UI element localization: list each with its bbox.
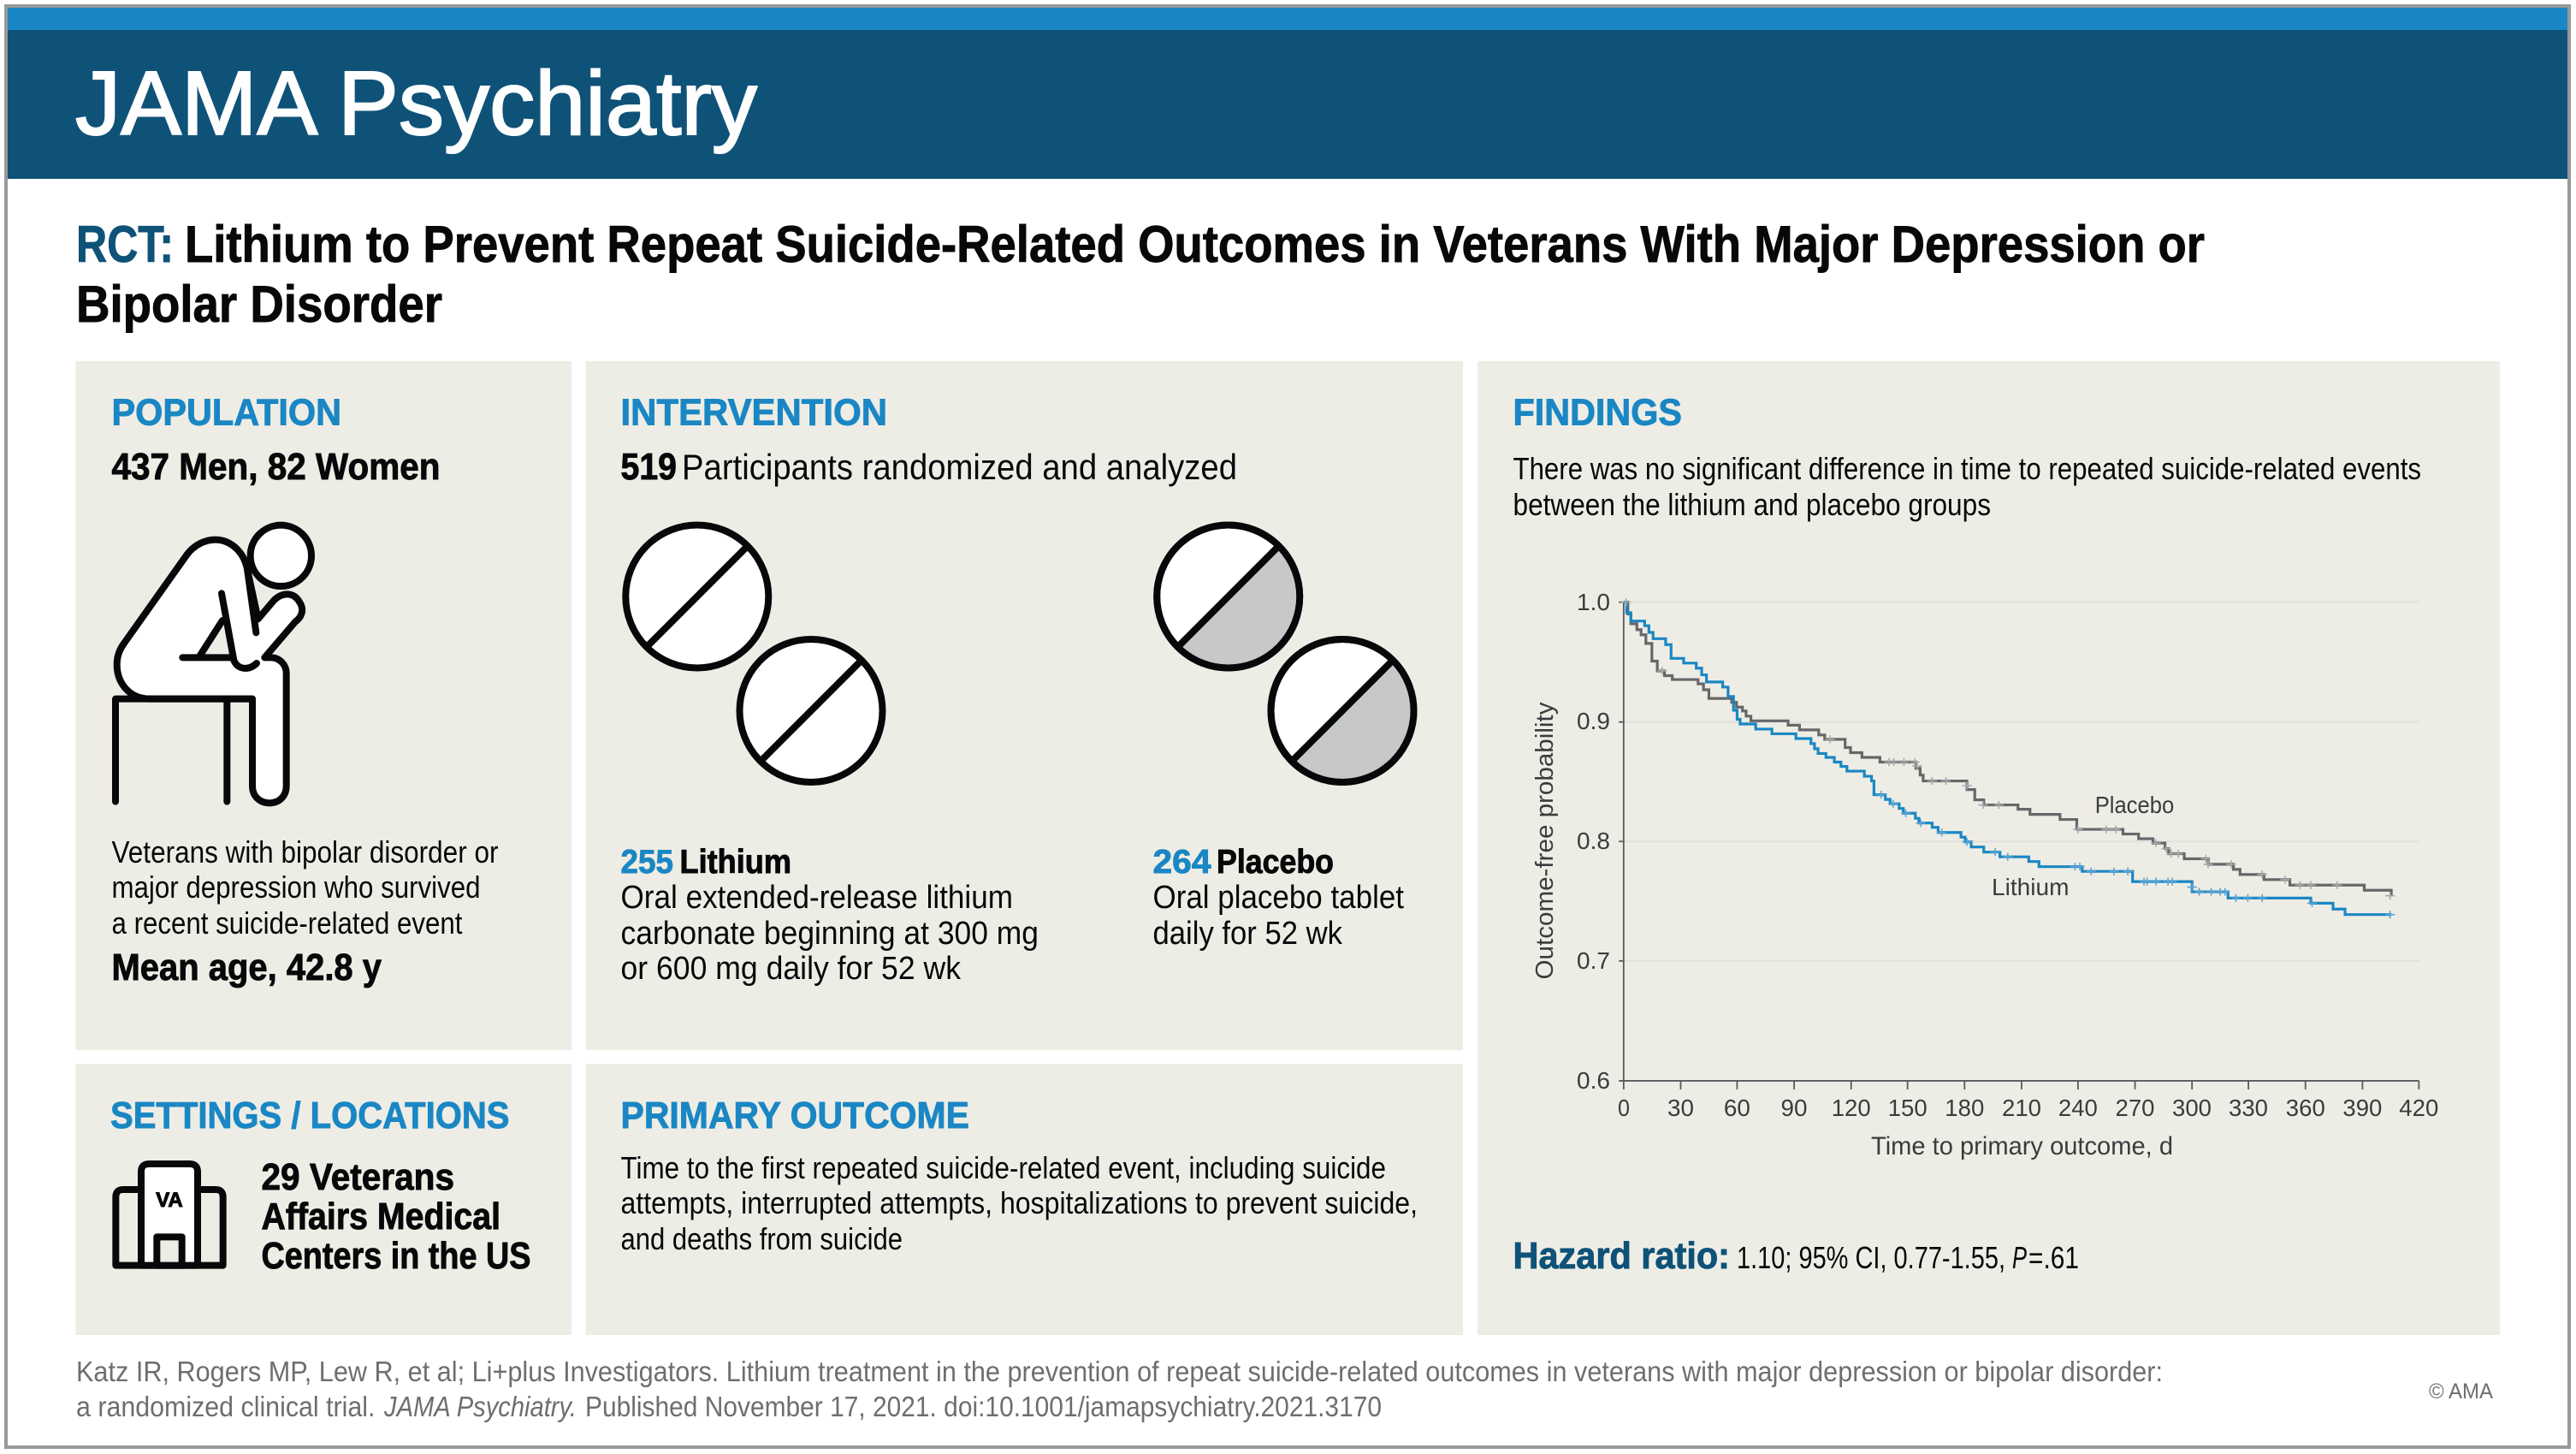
x axis tick labels: 0 bbox=[1618, 1095, 1630, 1121]
primary outcome text: and deaths from suicide bbox=[621, 1221, 903, 1256]
x axis tick labels: 240 bbox=[2058, 1095, 2098, 1121]
placebo arm text: daily for 52 wk bbox=[1153, 916, 1343, 952]
participants count: Participants randomized and analyzed bbox=[682, 447, 1237, 487]
x axis tick labels: 180 bbox=[1945, 1095, 1984, 1121]
mean age: Mean age, 42.8 y bbox=[111, 947, 382, 988]
primary outcome text bbox=[621, 1150, 1418, 1256]
findings text: between the lithium and placebo groups bbox=[1513, 487, 1991, 522]
placebo arm text: 264 bbox=[1153, 844, 1211, 881]
title: RCT: bbox=[76, 216, 174, 273]
primary outcome text: attempts, interrupted attempts, hospitalizations to prevent suicide, bbox=[621, 1185, 1418, 1220]
y axis tick labels: 0.7 bbox=[1577, 947, 1610, 974]
y axis tick labels: 0.8 bbox=[1577, 828, 1610, 854]
x axis tick labels: 420 bbox=[2399, 1095, 2438, 1121]
x axis tick labels: 360 bbox=[2286, 1095, 2325, 1121]
y axis tick labels bbox=[1577, 589, 1610, 1094]
primary outcome text: Time to the first repeated suicide-related event, including suicide bbox=[621, 1150, 1386, 1185]
y axis tick labels: 1.0 bbox=[1577, 589, 1610, 615]
icon: lithium pills bbox=[625, 525, 883, 782]
label: placebo: Placebo bbox=[2095, 792, 2174, 818]
y axis title: Outcome-free probability bbox=[1531, 702, 1559, 979]
lithium arm text: Lithium bbox=[679, 844, 791, 881]
panel: findings bbox=[1477, 361, 2500, 1335]
copyright: © AMA bbox=[2429, 1380, 2493, 1404]
heading: findings: FINDINGS bbox=[1513, 392, 1682, 433]
x axis title: Time to primary outcome, d bbox=[1871, 1132, 2173, 1160]
icon: VA building: VA bbox=[156, 1189, 183, 1212]
title: Lithium to Prevent Repeat Suicide-Related Outcomes in Veterans With Major Depression or bbox=[185, 216, 2205, 273]
participants count: 519 bbox=[621, 446, 677, 488]
hazard ratio: P bbox=[2012, 1240, 2027, 1275]
title: Bipolar Disorder bbox=[76, 276, 442, 333]
x axis tick labels bbox=[1618, 1095, 2438, 1121]
population description: a recent suicide-related event bbox=[111, 905, 462, 941]
hazard ratio bbox=[1513, 1235, 2079, 1277]
panel: population bbox=[75, 361, 571, 1050]
label: lithium: Lithium bbox=[1992, 874, 2069, 900]
lithium arm text: 255 bbox=[621, 844, 673, 881]
journal name: JAMA Psychiatry bbox=[75, 53, 757, 154]
x axis tick labels: 300 bbox=[2172, 1095, 2212, 1121]
panel: settings and locations bbox=[75, 1064, 571, 1335]
curve: placebo bbox=[1624, 602, 2391, 896]
title bbox=[76, 216, 2205, 333]
heading: settings: SETTINGS / LOCATIONS bbox=[110, 1095, 510, 1136]
lithium arm text bbox=[621, 844, 1039, 987]
x axis tick labels: 120 bbox=[1832, 1095, 1871, 1121]
x axis tick labels: 30 bbox=[1667, 1095, 1694, 1121]
lithium arm text: Oral extended-release lithium bbox=[621, 880, 1013, 916]
panel: primary outcome bbox=[585, 1064, 1463, 1335]
x axis tick labels: 210 bbox=[2002, 1095, 2041, 1121]
placebo arm text: Placebo bbox=[1217, 844, 1334, 881]
citation: JAMA Psychiatry. bbox=[383, 1391, 577, 1422]
x axis tick labels: 90 bbox=[1781, 1095, 1807, 1121]
lithium arm text: carbonate beginning at 300 mg bbox=[621, 916, 1039, 952]
x axis tick labels: 330 bbox=[2229, 1095, 2268, 1121]
icon: VA building bbox=[115, 1164, 223, 1266]
citation: Published November 17, 2021. doi:10.1001/jamapsychiatry.2021.3170 bbox=[585, 1391, 1382, 1422]
y axis tick labels: 0.9 bbox=[1577, 708, 1610, 734]
settings text: 29 Veterans bbox=[262, 1156, 454, 1198]
chart: Kaplan-Meier curves bbox=[1531, 589, 2438, 1160]
y axis tick labels: 0.6 bbox=[1577, 1067, 1610, 1094]
findings text bbox=[1513, 451, 2421, 522]
settings text: Centers in the US bbox=[262, 1235, 530, 1277]
heading: primary outcome: PRIMARY OUTCOME bbox=[621, 1095, 969, 1136]
hazard ratio: 1.10; 95% CI, 0.77-1.55, bbox=[1737, 1240, 2005, 1275]
x axis tick labels: 270 bbox=[2115, 1095, 2154, 1121]
population description: major depression who survived bbox=[111, 869, 481, 905]
findings text: There was no significant difference in time to repeated suicide-related events bbox=[1513, 451, 2421, 486]
panel: intervention bbox=[585, 361, 1463, 1050]
lithium arm text: or 600 mg daily for 52 wk bbox=[621, 951, 962, 987]
x axis tick labels: 150 bbox=[1888, 1095, 1928, 1121]
icon: placebo pills bbox=[1157, 525, 1413, 783]
header banner bbox=[8, 8, 2567, 179]
hazard ratio: Hazard ratio: bbox=[1513, 1235, 1730, 1277]
x axis tick labels: 60 bbox=[1724, 1095, 1750, 1121]
heading: population: POPULATION bbox=[111, 392, 341, 433]
curve: lithium bbox=[1624, 602, 2391, 915]
censor marks: lithium bbox=[1876, 791, 2395, 918]
icon: seated person bbox=[115, 525, 311, 803]
population count: 437 Men, 82 Women bbox=[111, 446, 440, 488]
placebo arm text: Oral placebo tablet bbox=[1153, 880, 1404, 916]
hazard ratio: =.61 bbox=[2028, 1240, 2079, 1275]
settings text: Affairs Medical bbox=[262, 1196, 500, 1237]
citation: a randomized clinical trial. bbox=[76, 1391, 375, 1422]
citation bbox=[76, 1356, 2163, 1422]
citation: Katz IR, Rogers MP, Lew R, et al; Li+plus Investigators. Lithium treatment in the prevention of repeat suicide-related outcomes in veterans with major depression or bipolar disorder: bbox=[76, 1356, 2163, 1387]
censor marks: placebo bbox=[1621, 598, 2395, 899]
x axis tick labels: 390 bbox=[2342, 1095, 2382, 1121]
population description: Veterans with bipolar disorder or bbox=[111, 834, 498, 869]
population description bbox=[111, 834, 498, 941]
settings text bbox=[262, 1156, 530, 1277]
heading: intervention: INTERVENTION bbox=[621, 392, 887, 433]
placebo arm text bbox=[1153, 844, 1404, 952]
